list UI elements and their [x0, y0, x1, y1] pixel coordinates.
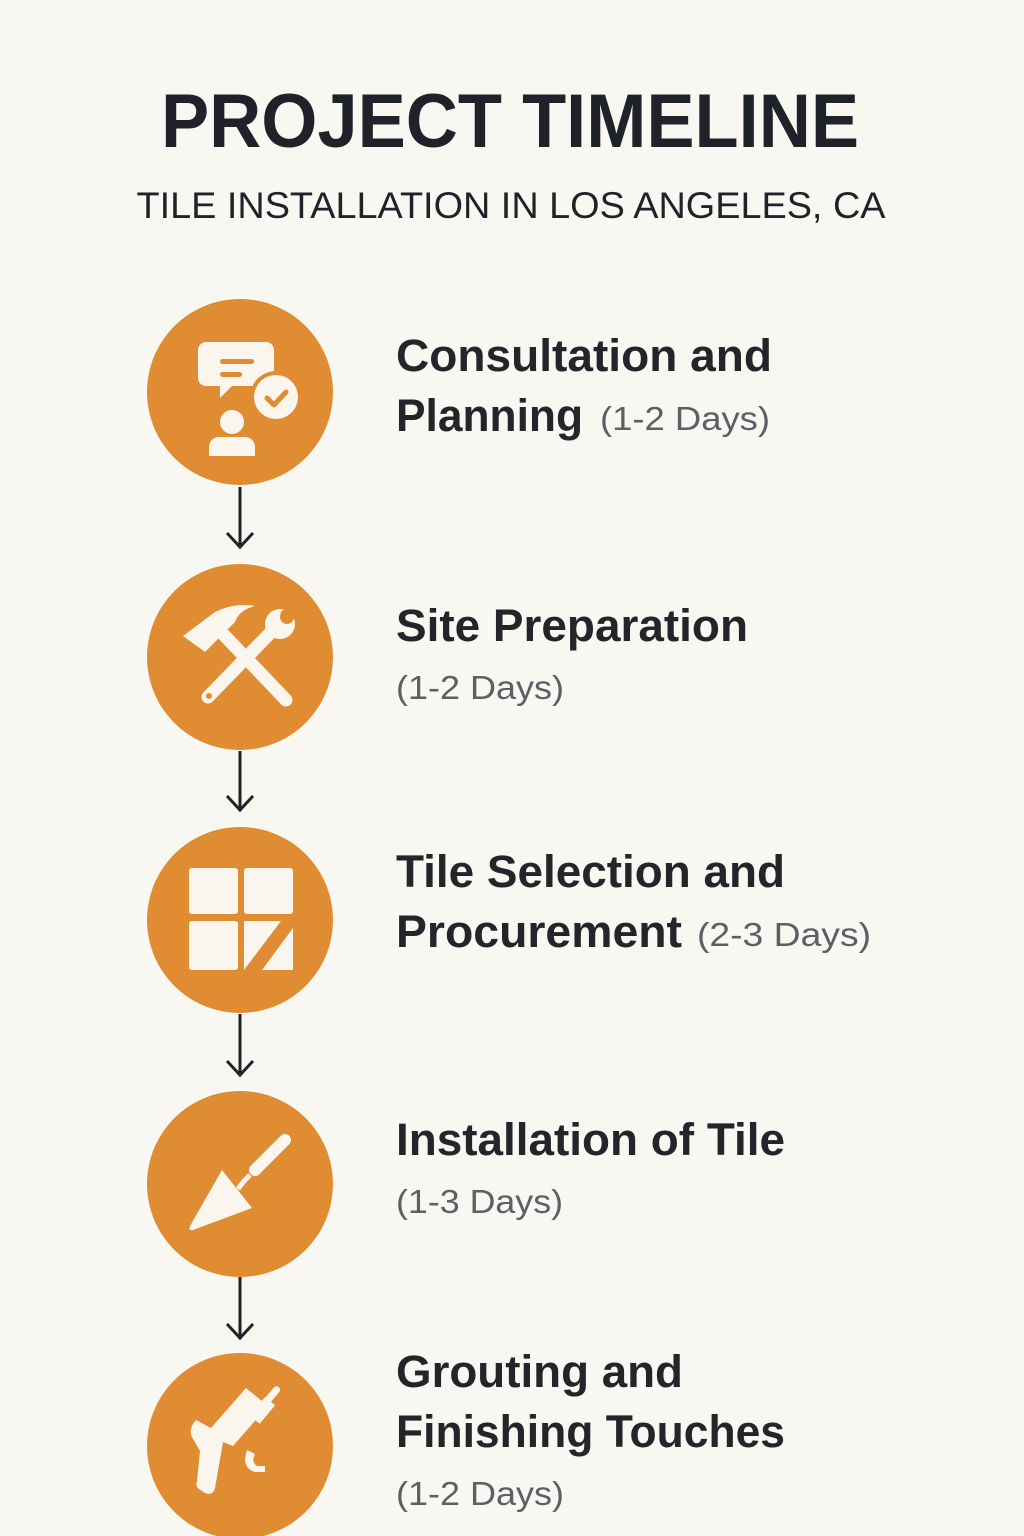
text: tile selection: Procurement	[396, 906, 682, 957]
step 1: consultation	[147, 299, 772, 485]
icon: trowel	[147, 1091, 333, 1277]
text: site preparation: (1-2 Days)	[396, 669, 564, 706]
text: tile selection	[396, 846, 871, 957]
arrow 1	[227, 487, 253, 547]
icon: caulk gun	[147, 1353, 333, 1536]
text: site preparation: Site Preparation	[396, 600, 748, 651]
icon: consultation	[147, 299, 333, 485]
arrow 2	[227, 751, 253, 810]
icon: hammer and wrench	[147, 564, 333, 750]
text: installation	[396, 1114, 785, 1220]
text: grouting: (1-2 Days)	[396, 1475, 564, 1512]
step 4: installation	[147, 1091, 785, 1277]
text: site preparation	[396, 600, 748, 706]
text: tile selection: Tile Selection and	[396, 846, 785, 897]
text: consultation	[396, 330, 772, 441]
title: PROJECT TIMELINE	[161, 79, 859, 164]
text: consultation: Planning	[396, 390, 583, 441]
step 5: grouting	[147, 1346, 785, 1536]
text: grouting	[396, 1346, 785, 1512]
arrow 3	[227, 1014, 253, 1075]
step 3: tile selection	[147, 827, 871, 1013]
subtitle: TILE INSTALLATION IN LOS ANGELES, CA	[136, 185, 886, 226]
text: installation: Installation of Tile	[396, 1114, 785, 1165]
icon: tiles	[147, 827, 333, 1013]
text: grouting: Grouting and	[396, 1346, 683, 1397]
text: tile selection: (2-3 Days)	[697, 916, 871, 953]
arrow 4	[227, 1277, 253, 1338]
text: consultation: (1-2 Days)	[600, 400, 770, 437]
text: consultation: Consultation and	[396, 330, 772, 381]
text: grouting: Finishing Touches	[396, 1406, 785, 1457]
step 2: site preparation	[147, 564, 748, 750]
text: installation: (1-3 Days)	[396, 1183, 563, 1220]
